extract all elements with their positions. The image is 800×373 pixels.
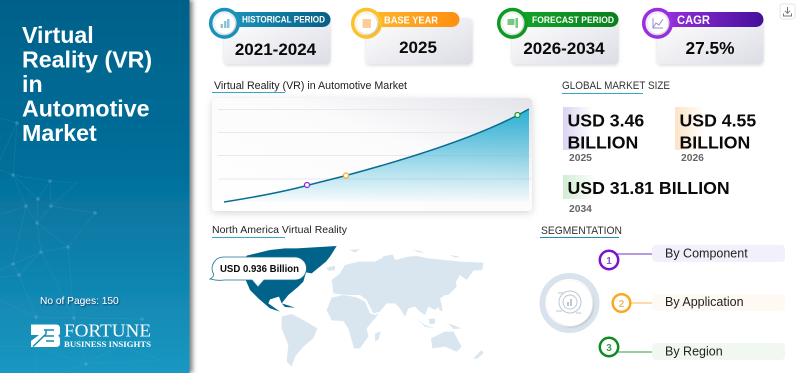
icon: growth badge	[644, 9, 671, 37]
value: 2026-2034: 2026-2034	[523, 39, 605, 58]
stat: 2025 market size: 2025	[569, 153, 592, 164]
segment: By Region: 3	[606, 343, 612, 354]
segment: By Application: By Application	[665, 295, 744, 309]
value: 2021-2024: 2021-2024	[235, 40, 317, 59]
pill: forecast period label: FORECAST PERIOD	[532, 15, 614, 26]
icon: forecast badge	[499, 9, 526, 37]
logo: Fortune Business Insights	[31, 320, 151, 349]
pill: CAGR label: CAGR	[677, 13, 710, 27]
heading: report title: Automotive	[22, 96, 150, 122]
segment: By Application	[613, 294, 785, 312]
chart: market growth curve	[212, 98, 532, 211]
segment: By Region	[600, 338, 785, 360]
marker: 2025	[304, 182, 310, 188]
pill: historical period label: HISTORICAL PERIOD	[242, 14, 325, 26]
logo: Fortune Business Insights: BUSINESS INSIGHTS	[64, 339, 151, 349]
heading: chart title: Virtual Reality (VR) in Automotive Market	[214, 80, 407, 92]
segment: By Component: By Component	[665, 246, 748, 260]
heading: North America: North America Virtual Reality	[212, 224, 348, 236]
stat: 2025 market size: USD 3.46	[568, 110, 644, 130]
stat: 2025 market size: BILLION	[568, 132, 638, 152]
icon: segmentation hub	[542, 276, 596, 330]
heading: report title: Reality (VR)	[22, 46, 152, 72]
stat: 2034 market size: USD 31.81 BILLION	[568, 178, 730, 198]
heading: global market size: GLOBAL MARKET SIZE	[562, 80, 670, 92]
stat: 2026 market size: 2026	[681, 153, 704, 164]
segment: By Component: 1	[606, 256, 612, 267]
stat: 2026 market size: USD 4.55	[680, 110, 756, 130]
map: world regional map	[243, 246, 483, 367]
heading: report title: in	[22, 71, 43, 97]
segment: By Component	[600, 245, 785, 269]
stat: 2026 market size	[675, 107, 756, 164]
marker: 2026	[344, 173, 348, 178]
panel: historical period	[211, 9, 331, 64]
segment: By Application: 2	[619, 299, 625, 310]
heading: segmentation: SEGMENTATION	[541, 225, 622, 237]
callout: USD 0.936 Billion: USD 0.936 Billion	[220, 264, 299, 275]
panel: base year	[353, 9, 472, 64]
stat: 2026 market size: BILLION	[680, 132, 750, 152]
value: 27.5%: 27.5%	[685, 38, 735, 58]
text: number of pages: No of Pages: 150	[40, 296, 119, 307]
heading: report title: Market	[22, 120, 97, 146]
icon: bar chart badge	[211, 9, 238, 37]
stat: 2025 market size	[563, 107, 644, 164]
logo: Fortune Business Insights: FORTUNE	[64, 320, 151, 340]
heading: report title	[22, 22, 152, 146]
trend line	[224, 109, 529, 202]
callout: USD 0.936 Billion	[210, 257, 306, 287]
marker: 2034	[515, 112, 520, 118]
stat: 2034 market size	[563, 175, 730, 215]
icon: calendar badge	[353, 9, 380, 37]
icon: download button	[780, 4, 795, 19]
panel: forecast period	[499, 9, 618, 64]
region: North America highlight	[243, 246, 337, 312]
pill: base year label: BASE YEAR	[384, 15, 438, 26]
area under curve	[224, 109, 529, 202]
value: 2025: 2025	[399, 38, 437, 57]
segment: By Region: By Region	[665, 344, 723, 358]
heading: report title: Virtual	[22, 22, 94, 48]
stat: 2034 market size: 2034	[569, 204, 592, 215]
panel: CAGR	[644, 9, 764, 64]
panel: title sidebar	[0, 0, 190, 373]
